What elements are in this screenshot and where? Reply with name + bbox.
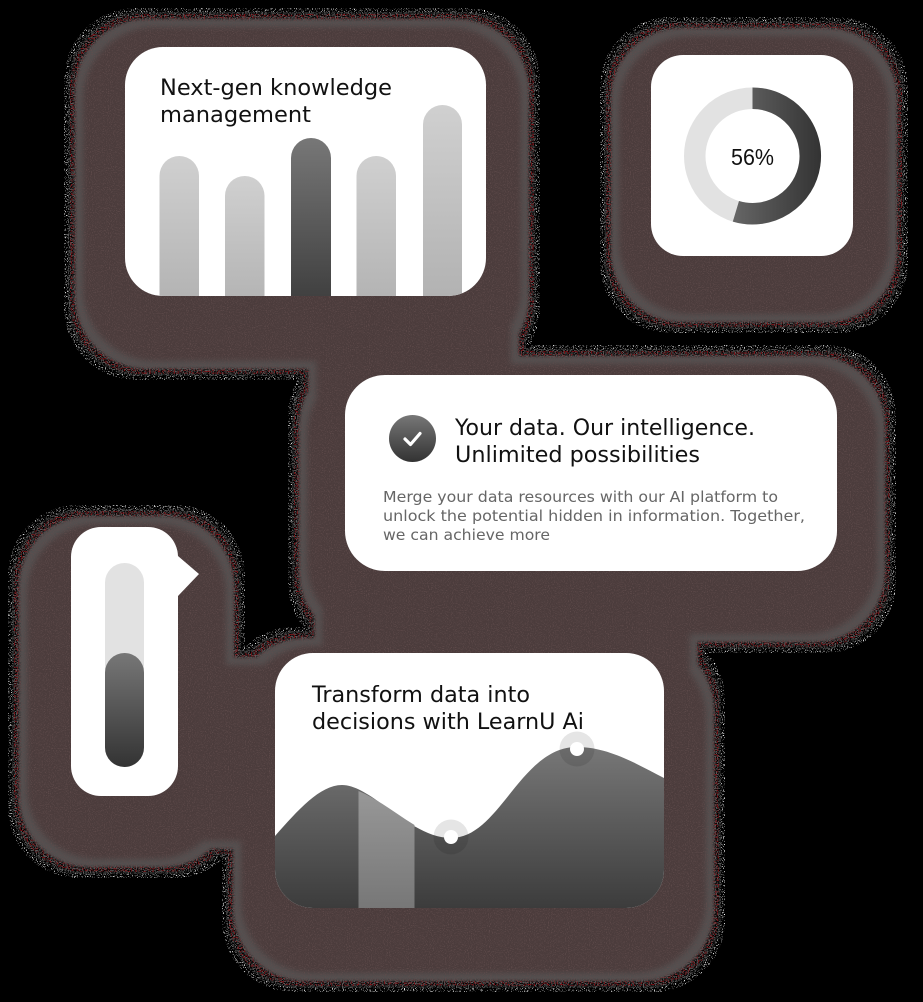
slider track [105, 563, 144, 767]
body text: unlock the potential hidden in information. Together, [383, 507, 805, 525]
slider fill [105, 653, 144, 767]
panel: donut chart card [651, 55, 853, 256]
heading: next-gen knowledge management: Next-gen knowledge [160, 76, 392, 101]
bar chart [160, 105, 462, 296]
panel: vertical slider callout [71, 527, 199, 796]
heading: your data: Unlimited possibilities [455, 443, 700, 468]
donut chart 56% [695, 98, 810, 214]
panel: next-gen knowledge management [125, 47, 486, 296]
marker: lower point [434, 820, 468, 854]
icon: check mark badge [389, 415, 436, 462]
heading: your data: Your data. Our intelligence. [454, 416, 755, 441]
area chart [275, 732, 664, 908]
panel: your data, our intelligence [345, 375, 837, 571]
highlighted band [358, 791, 414, 908]
body text [383, 488, 805, 544]
marker: upper point [560, 732, 594, 766]
body text: we can achieve more [383, 526, 550, 544]
panel: transform data into decisions [275, 653, 664, 908]
heading: transform data [311, 683, 584, 735]
heading: next-gen knowledge management [160, 76, 392, 128]
body text: Merge your data resources with our AI platform to [383, 488, 778, 506]
heading: transform data: decisions with LearnU Ai [312, 710, 584, 735]
heading: your data [454, 416, 755, 468]
heading: next-gen knowledge management: management [160, 103, 311, 128]
heading: transform data: Transform data into [311, 683, 530, 708]
donut value: 56% [731, 144, 774, 170]
